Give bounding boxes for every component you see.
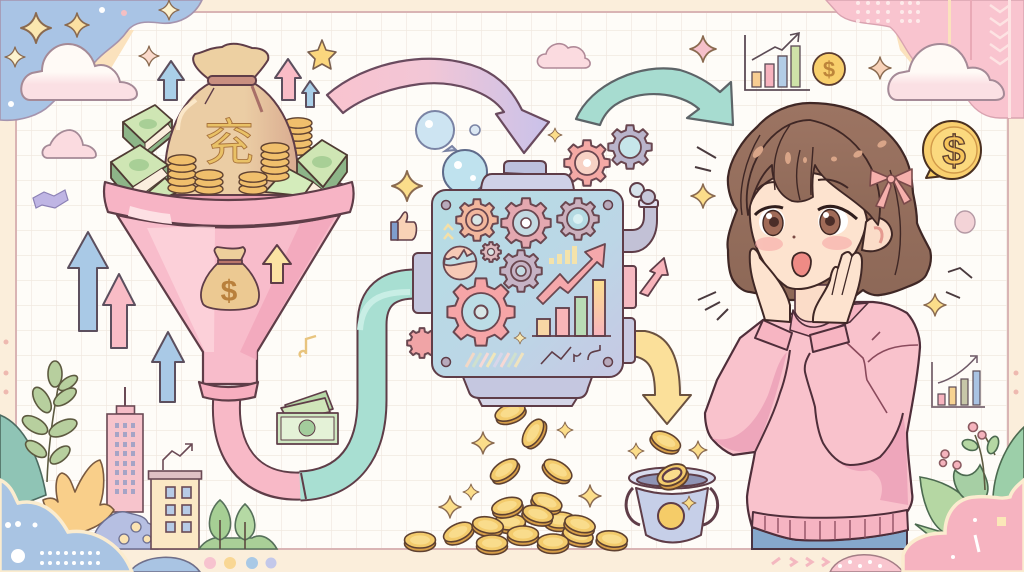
- bangs: [747, 120, 880, 225]
- left up arrows: [68, 59, 319, 402]
- surprise lines left lower: [698, 292, 728, 320]
- neck: [795, 285, 830, 322]
- arrow: small blue: [302, 81, 319, 107]
- sweater body: [705, 302, 920, 540]
- dollar sign: $: [823, 57, 835, 82]
- gear: outside left: [407, 328, 437, 358]
- arrow: big pink: [103, 274, 135, 348]
- bubble: small: [470, 125, 480, 135]
- coin pile: [404, 489, 628, 554]
- left eye: [755, 207, 785, 236]
- orange leaf: [43, 460, 114, 535]
- cloud: small pink left: [42, 130, 96, 158]
- back hair: [727, 103, 931, 300]
- right plants: [915, 422, 1024, 536]
- gear: outside lavender: [608, 125, 652, 169]
- ear: [862, 218, 892, 251]
- right cuff: [810, 325, 849, 352]
- music note shapes: [300, 336, 316, 357]
- blue flowers: [95, 512, 158, 549]
- funnel stem ring: [199, 382, 258, 400]
- nose: [792, 236, 796, 238]
- machine: [413, 161, 658, 406]
- bag glyph: 兖: [204, 103, 254, 175]
- funnel rim highlight: [128, 206, 172, 224]
- bubble: on machine: [443, 150, 487, 194]
- funnel highlight: [147, 226, 215, 352]
- bubble: large with tail: [416, 111, 456, 151]
- right hand: [813, 252, 862, 323]
- red growth arrow: [537, 244, 605, 304]
- gear: outside red: [564, 140, 610, 186]
- cash stack: right: [265, 140, 347, 205]
- face: [750, 172, 867, 289]
- gears in machine: [447, 198, 599, 346]
- cash bill: [277, 391, 338, 444]
- corner: bottom right pink cloud: [830, 480, 1024, 572]
- coin stacks: [168, 143, 289, 194]
- small droplet right: [955, 211, 975, 233]
- small line chart in machine: [541, 345, 600, 364]
- hair bow: [870, 169, 912, 208]
- dollar coin bubble: [923, 121, 981, 179]
- corner: bottom left blue cloud: [0, 480, 200, 572]
- falling coins: [487, 416, 575, 488]
- chart icon top: [745, 33, 810, 90]
- small dollar bag: [201, 247, 259, 310]
- machine panel: [432, 190, 623, 377]
- arrow: big blue: [68, 232, 108, 331]
- arrow: yellow output: [632, 331, 691, 424]
- arrow: top pink: [275, 59, 301, 100]
- arrow: yellow in funnel: [263, 245, 291, 283]
- pie chart: [444, 246, 476, 280]
- money bag: [165, 44, 298, 195]
- eyebrows: [757, 179, 848, 190]
- hem ribbing: [765, 514, 893, 540]
- jeans: [752, 528, 907, 549]
- cloud: top left: [21, 44, 137, 100]
- tower building: [107, 387, 143, 512]
- dollar coin top: [813, 53, 845, 85]
- right arm upper line: [847, 332, 918, 413]
- right arm line: [805, 353, 903, 465]
- ear inner: [874, 228, 882, 243]
- corner: top right pink: [826, 0, 1024, 118]
- machine side connector right lower: [620, 318, 635, 363]
- cash stack: top left: [123, 105, 172, 158]
- funnel with money: [104, 44, 354, 400]
- cloud: top right: [888, 44, 1004, 100]
- girl: [705, 103, 931, 549]
- collar ribbing: [790, 303, 868, 337]
- left cuff: [755, 320, 792, 350]
- panel sparkle: [514, 332, 526, 344]
- star: [308, 40, 336, 69]
- funnel shadow: [240, 217, 335, 360]
- machine screws: [442, 200, 612, 366]
- dollar sign: $: [221, 275, 238, 308]
- bar chart in machine: [532, 280, 611, 336]
- chevrons: [444, 225, 453, 239]
- bucket: [626, 460, 718, 542]
- machine pipe: [622, 205, 657, 252]
- sweater shadow: [823, 413, 908, 505]
- striped panel strip: [466, 353, 523, 367]
- arrow: mint curve: [576, 68, 733, 125]
- machine bottom caps: [463, 377, 592, 398]
- surprise lines left upper: [695, 147, 716, 171]
- left hand: [750, 249, 790, 322]
- cloud: small pink top: [537, 44, 590, 68]
- corner: top left blue: [0, 0, 202, 120]
- tube: pink to mint pipe: [226, 284, 416, 499]
- coin stack behind bag: [284, 118, 312, 155]
- funnel back rim: [105, 174, 351, 206]
- cash stack: lower left: [111, 145, 178, 204]
- sparkles around coins: [392, 36, 946, 518]
- machine top caps: [504, 161, 546, 175]
- coin under machine: [493, 399, 528, 428]
- small lavender blob left: [33, 190, 68, 208]
- machine side connector left: [413, 253, 435, 313]
- hair highlights: [751, 139, 888, 164]
- mouth: [792, 253, 811, 276]
- blush: [755, 236, 852, 251]
- arrow: top blue: [158, 61, 184, 100]
- sweater hem: [752, 510, 908, 540]
- left arm shadow: [712, 352, 787, 452]
- chart icon right: [932, 356, 985, 407]
- machine side connector right upper: [620, 266, 636, 308]
- bottom chevrons: [772, 558, 828, 566]
- dollar sign: $: [942, 127, 966, 174]
- right eye: [818, 206, 857, 235]
- arrow: lower blue: [152, 332, 184, 402]
- finger lines: [832, 256, 852, 295]
- thumbs up: [391, 212, 416, 240]
- left arm inner line: [755, 350, 790, 452]
- small trees: [199, 500, 277, 549]
- arrow: small pink: [640, 258, 668, 296]
- cream building: [148, 444, 202, 549]
- pastel dots bottom: [204, 557, 276, 569]
- faint bars: [549, 246, 577, 264]
- coin flying into bucket: [647, 427, 683, 458]
- green leaf branch left: [19, 361, 80, 482]
- funnel rim: [104, 182, 354, 226]
- arrow: pink to lavender curve: [327, 59, 549, 153]
- hair strands: [741, 125, 900, 275]
- surprise lines right: [946, 268, 972, 298]
- funnel cone: [117, 215, 340, 384]
- sparkle: top left: [139, 46, 159, 66]
- big teal leaf bottom left: [0, 415, 46, 506]
